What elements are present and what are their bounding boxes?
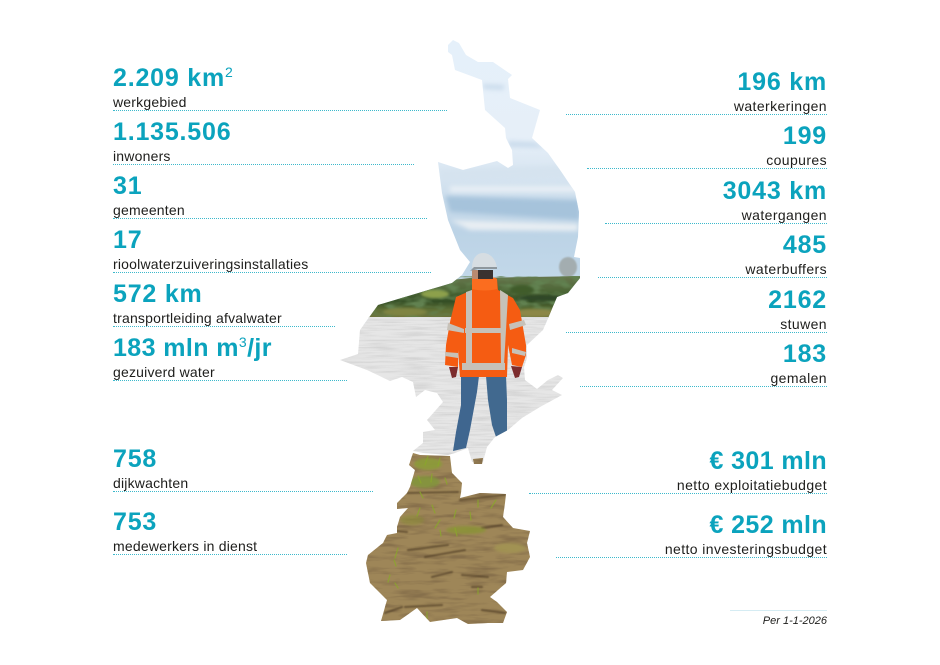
- stat: waterbuffers: waterbuffers: [745, 261, 827, 277]
- stat: werkgebied: 2.209 km2: [113, 64, 234, 92]
- worker: [445, 253, 526, 451]
- stat: gezuiverd water: 183 mln m3/jr: [113, 334, 272, 362]
- stat: transportleiding afvalwater: 572 km: [113, 280, 203, 308]
- stat: transportleiding afvalwater: [113, 282, 335, 327]
- stat: gemeenten: 31: [113, 172, 142, 200]
- stat: stuwen: stuwen: [780, 316, 827, 332]
- stat: medewerkers in dienst: 753: [113, 508, 157, 536]
- stat: waterbuffers: [598, 233, 827, 278]
- stat: stuwen: [566, 288, 827, 333]
- stat: dijkwachten: dijkwachten: [113, 475, 188, 491]
- stat: waterbuffers: 485: [783, 231, 827, 259]
- stat: watergangen: 3043 km: [723, 177, 827, 205]
- legs: [453, 375, 479, 451]
- stat: medewerkers in dienst: medewerkers in dienst: [113, 538, 257, 554]
- stat: netto investeringsbudget: [556, 513, 827, 558]
- stat: watergangen: [605, 179, 827, 224]
- stat: waterkeringen: 196 km: [737, 68, 827, 96]
- soil part of the map: [366, 453, 530, 624]
- map of the region filled with photo: [340, 40, 580, 624]
- stat: rioolwaterzuiveringsinstallaties: 17: [113, 226, 142, 254]
- stat: netto investeringsbudget: netto investeringsbudget: [665, 541, 827, 557]
- stat: werkgebied: werkgebied: [113, 94, 187, 110]
- photo: sky, treeline, water and worker: [335, 35, 585, 467]
- stat: inwoners: inwoners: [113, 148, 171, 164]
- stat: coupures: 199: [783, 122, 827, 150]
- stat: inwoners: 1.135.506: [113, 118, 231, 146]
- stat: waterkeringen: waterkeringen: [734, 98, 827, 114]
- stat: gemeenten: [113, 174, 427, 219]
- stat: gezuiverd water: [113, 336, 347, 381]
- stat: watergangen: watergangen: [742, 207, 827, 223]
- stat: gemalen: gemalen: [770, 370, 827, 386]
- stat: netto investeringsbudget: € 252 mln: [709, 511, 827, 539]
- date note: [730, 610, 827, 629]
- water: [340, 317, 563, 462]
- stat: stuwen: 2162: [768, 286, 827, 314]
- neck and helmet: [478, 270, 493, 279]
- stat: rioolwaterzuiveringsinstallaties: rioolwaterzuiveringsinstallaties: [113, 256, 308, 272]
- stat: werkgebied: [113, 66, 447, 111]
- grass sprigs: [388, 456, 496, 621]
- stat: netto exploitatiebudget: netto exploitatiebudget: [677, 477, 827, 493]
- stat: gezuiverd water: gezuiverd water: [113, 364, 215, 380]
- stat: gemalen: [580, 342, 827, 387]
- bare tree: [559, 257, 577, 277]
- stat: inwoners: [113, 120, 414, 165]
- jacket: [445, 277, 526, 377]
- stat: gemalen: 183: [783, 340, 827, 368]
- green patches: [400, 458, 526, 553]
- stat: gemeenten: gemeenten: [113, 202, 185, 218]
- stat: rioolwaterzuiveringsinstallaties: [113, 228, 431, 273]
- trees: [360, 276, 585, 318]
- stat: coupures: coupures: [766, 152, 827, 168]
- stat: netto exploitatiebudget: [529, 449, 827, 494]
- date note: Per 1-1-2026: [763, 615, 827, 627]
- stat: coupures: [587, 124, 827, 169]
- stat: waterkeringen: [566, 70, 827, 115]
- stat: medewerkers in dienst: [113, 510, 347, 555]
- stat: dijkwachten: 758: [113, 445, 157, 473]
- hands: [449, 367, 458, 378]
- stat: dijkwachten: [113, 447, 373, 492]
- reflective stripes: [445, 290, 526, 370]
- dark furrows: [385, 492, 505, 613]
- stat: netto exploitatiebudget: € 301 mln: [709, 447, 827, 475]
- stat: transportleiding afvalwater: transportleiding afvalwater: [113, 310, 282, 326]
